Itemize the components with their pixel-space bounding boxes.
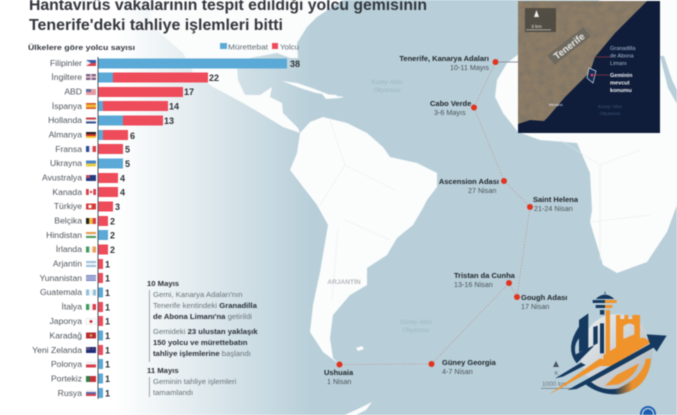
stop: Cabo Verde: Cabo Verde — [430, 99, 471, 108]
bar values: 17 — [184, 87, 194, 97]
bar values: 2 — [110, 230, 115, 240]
map: Africa — [495, 0, 677, 273]
country labels: Fransa — [55, 144, 82, 154]
stop: Cabo Verde: 3-6 Mayıs — [434, 108, 466, 117]
bar chart — [32, 57, 300, 399]
timeline text: tahliye işlemlerine başlandı — [153, 349, 251, 358]
stop: Tenerife: 10-11 Mayıs — [450, 63, 489, 72]
country label: Arjantin: ARJANTİN — [327, 278, 361, 286]
map: Red Sea — [660, 56, 677, 104]
stop: Tenerife: Tenerife, Kanarya Adaları — [399, 54, 489, 63]
bar values: 13 — [164, 116, 174, 126]
bars — [98, 58, 287, 398]
bar values: 1 — [105, 316, 110, 326]
stop: Tenerife — [399, 54, 498, 72]
bar values: 4 — [120, 174, 125, 184]
country labels: İtalya — [61, 302, 82, 312]
timeline text: Tenerife kentindeki Granadilla — [153, 301, 258, 310]
bar values: 1 — [105, 374, 110, 384]
stop: Ushuaia: 1 Nisan — [327, 377, 351, 386]
timeline text: Geminin tahliye işlemleri — [153, 377, 237, 386]
inset: port label: Granadilla — [610, 46, 636, 52]
country labels: İngiltere — [51, 72, 82, 82]
country labels: Guatemala — [40, 287, 82, 297]
bar values: 2 — [110, 216, 115, 226]
timeline text: 150 yolcu ve mürettebatın — [153, 338, 248, 347]
timeline text: Gemideki 23 ulustan yaklaşık — [153, 327, 258, 336]
bar values: 1 — [105, 360, 110, 370]
inset: ship position label: konumu — [610, 88, 632, 94]
country labels: Polonya — [51, 359, 82, 369]
inset: land — [518, 1, 647, 124]
logo: bottom crescent — [584, 358, 651, 394]
stop: Gough: Gough Adası — [521, 293, 567, 302]
inset: scale box — [525, 8, 556, 32]
map: country borders — [320, 120, 650, 300]
title — [29, 0, 427, 34]
inset: ocean label: Okyanusu — [600, 111, 621, 116]
country labels: Arjantin — [53, 258, 82, 268]
ocean labels: Kuzey Atlas — [371, 80, 403, 86]
country labels: Hollanda — [48, 115, 82, 125]
country labels: Rusya — [58, 388, 82, 398]
inset: port marker and ship area — [587, 57, 610, 83]
inset: port label: de Abona — [610, 54, 635, 60]
stop: Tristan da Cunha — [454, 271, 516, 289]
stop: Saint Helena — [527, 195, 579, 213]
map: South America — [290, 117, 437, 364]
bar values: 6 — [130, 131, 135, 141]
country labels: İrlanda — [56, 244, 82, 254]
flags — [86, 60, 96, 396]
stop: Tristan da Cunha: 13-16 Nisan — [454, 280, 493, 289]
map: Antarctic peninsula — [345, 402, 372, 415]
legend: Yolcu — [280, 42, 299, 52]
bar axis — [98, 57, 99, 399]
bar values: 5 — [125, 144, 130, 154]
country labels: ABD — [64, 86, 82, 96]
country labels: Belçika — [54, 216, 82, 226]
map: North and Central America — [150, 0, 343, 133]
logo: inner crescent — [605, 363, 639, 386]
logo: navy arrow — [568, 334, 667, 390]
country labels: Kanada — [52, 187, 82, 197]
inset satellite map — [518, 1, 660, 133]
timeline text: 11 Mayıs — [147, 366, 179, 375]
inset connector line — [498, 62, 518, 63]
country labels: Portekiz — [51, 374, 82, 384]
legend: Mürettebat — [228, 42, 268, 52]
inset: ship position label: Geminin — [610, 73, 633, 79]
legend — [220, 42, 299, 52]
stop: Saint Helena: 21-24 Nisan — [534, 204, 573, 213]
bar values: 1 — [105, 331, 110, 341]
ocean labels: Güney Atlas — [400, 320, 432, 326]
inset: Medano label: Médano — [549, 103, 563, 107]
ocean labels: Okyanusu — [402, 328, 430, 334]
inset: ship position label — [610, 73, 633, 94]
bar values: 5 — [125, 159, 130, 169]
country labels: Avustralya — [42, 172, 82, 182]
country labels: İspanya — [52, 101, 82, 111]
timeline text: de Abona Limanı'na getirildi — [153, 312, 252, 321]
stop: Ascension: 27 Nisan — [468, 186, 496, 195]
logo: castle — [603, 315, 648, 361]
ocean labels: Okyanusu — [373, 88, 401, 94]
ship route — [340, 62, 530, 364]
bar values: 1 — [105, 288, 110, 298]
bar values — [105, 59, 300, 398]
stop: Saint Helena: Saint Helena — [533, 195, 579, 204]
logo: orange streak — [548, 340, 652, 395]
map: Caribbean islands — [282, 81, 344, 99]
title: Tenerife'deki tahliye işlemleri bitti — [29, 17, 283, 34]
bar values: 4 — [120, 188, 125, 198]
logo: navy sliver — [555, 363, 586, 378]
map scale: 1000 km — [542, 381, 567, 388]
bar values: 14 — [169, 102, 179, 112]
bar values: 1 — [105, 274, 110, 284]
country labels: Japonya — [50, 316, 82, 326]
stop: Gough: 17 Nisan — [521, 302, 549, 311]
timeline text — [147, 279, 258, 397]
bar values: 2 — [110, 245, 115, 255]
country labels: Karadağ — [50, 330, 82, 340]
timeline text: 10 Mayıs — [147, 279, 179, 288]
country labels: Hindistan — [46, 230, 82, 240]
bar values: 1 — [105, 260, 110, 270]
map scale — [541, 361, 571, 389]
country labels: Türkiye — [54, 201, 82, 211]
stop: Ushuaia — [324, 362, 354, 386]
country labels: Filipinler — [50, 58, 82, 68]
inset: port label — [610, 46, 636, 67]
chart heading: Ülkelere göre yolcu sayısı — [28, 43, 135, 52]
bar values: 3 — [115, 202, 120, 212]
inset: port label: Limanı — [610, 61, 627, 67]
map scale: K — [555, 371, 559, 377]
bar values: 38 — [290, 59, 300, 69]
country labels: Yunanistan — [39, 273, 82, 283]
timeline text: tamamlandı — [153, 388, 193, 397]
stop: Gough — [514, 293, 567, 311]
bar values: 1 — [105, 302, 110, 312]
inset: ship position label: mevcut — [610, 80, 630, 86]
country labels: Ukrayna — [50, 158, 82, 168]
timeline text: Gemi, Kanarya Adaları'nın — [153, 290, 242, 299]
logo: tower — [593, 291, 617, 358]
watermark logo — [548, 291, 667, 395]
bar values: 1 — [105, 346, 110, 356]
map: Falkland islands — [356, 346, 364, 351]
country labels — [32, 58, 82, 398]
stop: Ushuaia: Ushuaia — [324, 368, 354, 377]
country labels: Almanya — [49, 130, 82, 140]
stop: South Georgia: Güney Georgia — [442, 358, 497, 367]
route stops — [324, 54, 579, 386]
stop: Cabo Verde — [430, 99, 477, 117]
inset: ocean label: Kuzey Atlas — [598, 104, 623, 109]
stop: South Georgia — [428, 358, 497, 376]
stop: Ascension — [439, 177, 507, 195]
Anadolu Agency mark — [640, 406, 656, 415]
stop: South Georgia: 4-7 Nisan — [442, 367, 473, 376]
country labels: Yeni Zelanda — [32, 345, 82, 355]
logo: left skyline arc — [571, 313, 598, 363]
inset: scale box: 3 km — [531, 24, 542, 30]
bar values: 1 — [105, 388, 110, 398]
ocean labels — [371, 80, 432, 334]
bar values: 22 — [209, 73, 219, 83]
stop: Ascension: Ascension Adası — [439, 177, 499, 186]
inset: Tenerife label — [547, 27, 591, 65]
stop: Tristan da Cunha: Tristan da Cunha — [454, 271, 516, 280]
inset: Tenerife label: Tenerife — [552, 31, 587, 62]
inset: ocean label — [598, 104, 623, 116]
